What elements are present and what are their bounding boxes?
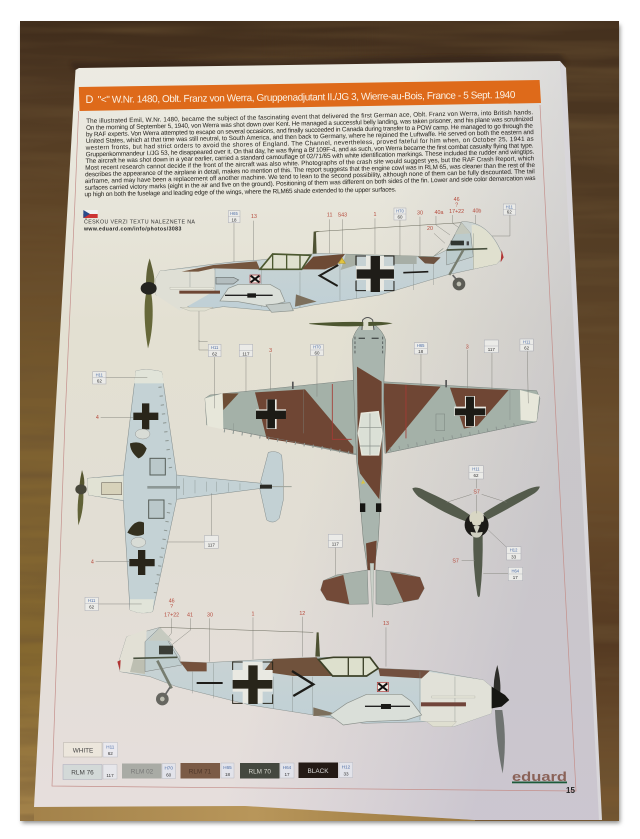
stencil numbers: 40a (435, 210, 443, 216)
side view: port profile with callouts: H70 (396, 208, 404, 213)
callouts for plan views: 33 (511, 554, 517, 559)
fuselage (118, 627, 493, 727)
stencil numbers: 11 (327, 213, 332, 219)
antenna mast and wire (160, 627, 320, 657)
chip: RLM 76: RLM 76 (71, 770, 94, 776)
stencil numbers: 46 (454, 197, 460, 203)
fuselage (352, 325, 386, 570)
icon: Czech flag (83, 210, 98, 218)
nose detail (355, 318, 383, 353)
chip: white: WHITE (73, 748, 93, 754)
callouts for plan views: 17 (513, 575, 518, 580)
title: D "<" W.Nr. 1480, Oblt. Franz von Werra, Gruppenadjutant II./JG 3, Wierre-au-Bois, France - 5 Sept. 1940 (85, 89, 516, 106)
exhaust strip (170, 287, 220, 294)
side view: port profile with callouts: 62 (507, 210, 512, 215)
rear patch (366, 541, 377, 570)
white cowling and rudder (156, 225, 504, 311)
note text: ČESKOU VERZI TEXTU NALEZNETE NA (84, 219, 195, 226)
fuselage black bars (360, 503, 381, 512)
white rudder and cowl (117, 629, 493, 727)
logo: eduard: eduard (512, 769, 567, 784)
white nose and wing tips (87, 370, 164, 613)
panel lines (193, 663, 455, 723)
stencil numbers (251, 197, 481, 232)
yellow marking (361, 479, 365, 485)
chip: black (298, 762, 353, 778)
callouts for plan views: H11 (472, 467, 480, 472)
page number: 15 (566, 786, 575, 795)
underside view (75, 370, 292, 613)
chip: RLM 02: 60 (166, 772, 172, 778)
chip: white: H11 (106, 744, 115, 750)
callouts for plan views: H11 (211, 345, 219, 350)
colour boxes: H65 (230, 211, 238, 216)
callouts for plan views: 62 (473, 473, 479, 478)
callouts for plan views: S7 (473, 490, 480, 496)
yellow triangle (339, 258, 345, 263)
camouflage top (182, 248, 443, 272)
propeller blades (309, 322, 393, 326)
panel lines (183, 478, 240, 495)
text block: history (84, 109, 536, 198)
tail fin (370, 563, 374, 617)
text block: history: by RAF experts. Von Werra attempted to escape on several occasions, and finally succeeded in Canada during transfer to a POW camp. He managed to go through the (86, 123, 533, 138)
canopy (358, 412, 382, 455)
fin (133, 627, 182, 688)
chip: RLM 76: 117 (106, 773, 114, 778)
chip: RLM 71: RLM 71 (189, 768, 212, 776)
stencil numbers: 46 (169, 599, 175, 605)
text block: history: airframe, and may have been a replacement off another machine. We tend to lean to the second possibility, although none of them can be fully discounted. The tail (85, 168, 535, 185)
note text: www.eduard.com/info/photos/3083 (83, 226, 181, 232)
chip: RLM 02 (122, 764, 176, 778)
fuselage (156, 222, 503, 312)
callouts for plan views: 117 (208, 543, 215, 548)
fuselage (87, 475, 262, 501)
text block: history: surfaces carried victory marks (eight in the air and five on the ground). Positioning of them was different on both sides of the fin. Lower and side color demarcation was (85, 175, 536, 192)
text block: history: Gruppenkommandeur I./JG 53, he disappeared over it. On that day, he was flying a Bf 109F-4, and as such, von Werra became the first combat casualty flying that type. (86, 142, 534, 158)
callouts for plan views: H64 (511, 568, 520, 573)
camouflage top (180, 657, 430, 678)
callouts for plan views: 3 (466, 345, 469, 351)
stencil numbers: 13 (383, 621, 389, 627)
propeller (492, 665, 509, 773)
side view: port profile with callouts: H11 (506, 204, 514, 209)
squadron emblem (377, 682, 388, 692)
stencil numbers: ? (455, 203, 458, 209)
canopy (318, 657, 378, 676)
left wing (205, 380, 357, 455)
callouts for plan views: H12 (510, 548, 518, 553)
callouts for plan views (85, 339, 533, 611)
stencil numbers: 20 (427, 226, 433, 232)
chip: RLM 71: H65 (223, 765, 232, 770)
header band (79, 80, 541, 111)
fin (447, 223, 487, 275)
chip: black: 33 (343, 772, 349, 776)
stencil numbers (164, 599, 389, 627)
stencil numbers: 1 (373, 212, 376, 218)
colour boxes: 18 (231, 217, 237, 222)
chip: RLM 70: 17 (284, 772, 290, 777)
callouts for plan views: H65 (417, 343, 425, 348)
text block: history: up high on both the fuselage and leading edge of the wings, where the RLM65 shade extended to the upper surfaces. (84, 186, 397, 198)
chip: RLM 70: H64 (283, 765, 292, 770)
propeller (141, 258, 157, 348)
tail wheel (156, 687, 170, 705)
tailplane (321, 570, 424, 605)
callout leaders (163, 617, 386, 667)
callouts for plan views: 62 (97, 378, 102, 383)
tail detail (260, 485, 292, 489)
chip: white: 62 (108, 751, 113, 756)
note text (83, 219, 195, 232)
callouts for plan views: 117 (332, 542, 339, 547)
callouts for plan views: 4 (91, 559, 94, 565)
stencil numbers: S43 (338, 213, 347, 219)
side view: port profile with callouts: 60 (397, 215, 403, 220)
callouts for plan views: 60 (314, 351, 320, 356)
callouts for plan views: H11 (88, 598, 96, 603)
panel lines (190, 233, 473, 307)
wings (123, 370, 177, 613)
chip: RLM 02: H70 (164, 766, 173, 770)
chip: black: H12 (342, 764, 351, 770)
callouts for plan views: 62 (524, 346, 530, 351)
exhaust strip (421, 696, 475, 706)
callouts for plan views: 117 (242, 351, 250, 356)
chip: RLM 02: RLM 02 (131, 768, 154, 776)
crosses (129, 403, 158, 575)
text block: history: The illustrated Emil, W.Nr. 1480, became the subject of the fascinating event that delivered the first German ace, Oblt. Franz von Werra, into British hands. (86, 109, 533, 125)
blades (412, 487, 540, 597)
chip: RLM 70: RLM 70 (249, 768, 271, 776)
text block: history: United States, which at that time was still neutral, to South America, and then back to Germany, where he rejoined the Luftwaffe. He served on both the eastern and (86, 129, 534, 145)
callouts for plan views: 18 (418, 349, 424, 354)
callouts for plan views: H70 (313, 345, 321, 350)
brown spine (357, 367, 382, 499)
chip: RLM 71 (180, 763, 234, 778)
plan views and propeller view (75, 318, 540, 617)
callouts for plan views: H11 (523, 339, 531, 344)
callouts for plan views: 117 (488, 347, 495, 352)
antenna mast and wire (313, 223, 462, 254)
tailplane (259, 452, 283, 522)
chip: black: BLACK (308, 768, 329, 775)
wing root and cowl intake (180, 277, 317, 312)
stencil numbers: 17+22 (164, 612, 179, 618)
bar marking (197, 680, 223, 686)
spinner front view (412, 487, 540, 597)
right wing (382, 380, 540, 453)
chip: RLM 76 (63, 764, 117, 780)
text block: history: Most recent research cannot decide if the front of the aircraft was also white. Photographs of the crash site would suggest yes, but the RAF Crash Report, which (85, 155, 535, 172)
chevron marking (292, 671, 313, 696)
callouts for plan views: 3 (269, 348, 272, 354)
tail wheel (453, 275, 465, 290)
callouts for plan views: 62 (89, 605, 95, 610)
propeller (75, 470, 87, 525)
wing root (313, 694, 457, 727)
stencil numbers: 12 (299, 611, 305, 617)
text block: history: describes the appearance of the airplane in detail, makes no mention of this. The report suggests that the engine cowl was in RLM 65, was cleaner than the rest of the (85, 162, 536, 178)
chip: white (64, 742, 118, 757)
side view: port profile with callouts (141, 197, 516, 348)
hub (465, 511, 489, 538)
callouts for plan views: S7 (452, 558, 459, 564)
chevron marking (320, 265, 338, 286)
side view: starboard profile with callouts (117, 599, 509, 773)
callout leaders (199, 215, 510, 342)
stencil numbers: ? (170, 604, 173, 610)
wing crosses (256, 396, 486, 429)
stencil numbers: 40b (473, 209, 481, 215)
chip: RLM 71: 18 (225, 772, 230, 777)
stencil numbers: 30 (207, 612, 213, 618)
text block: history: The aircraft he was shot down in a year earlier, carried a standard camouflage of 02/71/65 with white identification markings. These included the rudder and wingtips. (85, 149, 535, 165)
canopy (260, 254, 311, 269)
text block: history: western fronts, but had strict orders to avoid the shores of England. The Channel, nevertheless, proved fateful for him when, on October 25, 1941 as (85, 136, 534, 152)
stencil numbers: 13 (251, 214, 257, 220)
callouts for plan views: 62 (212, 351, 218, 356)
callouts for plan views: 4 (96, 415, 99, 421)
radiators and wheel wells (127, 429, 165, 547)
chip: RLM 70 (240, 763, 294, 778)
colour boxes (228, 211, 240, 223)
balkenkreuz (233, 662, 273, 704)
text block: history: On the morning of September 5, 1940, von Werra was shot down over Kent. He managed a successful belly landing, was taken prisoner, and his plane was scrutinized (86, 116, 534, 132)
bar marking (403, 269, 428, 275)
legend: paint chips (63, 742, 353, 780)
callouts for plan views: H11 (96, 372, 104, 377)
stencil numbers: 17+22 (449, 209, 464, 215)
stencil numbers: 41 (187, 612, 193, 618)
squadron emblem (250, 275, 260, 283)
Czech language note (83, 210, 195, 232)
stencil numbers: 30 (417, 210, 423, 216)
balkenkreuz (356, 256, 394, 292)
stencil numbers: 1 (252, 612, 255, 618)
top view: upper surfaces (205, 318, 540, 617)
